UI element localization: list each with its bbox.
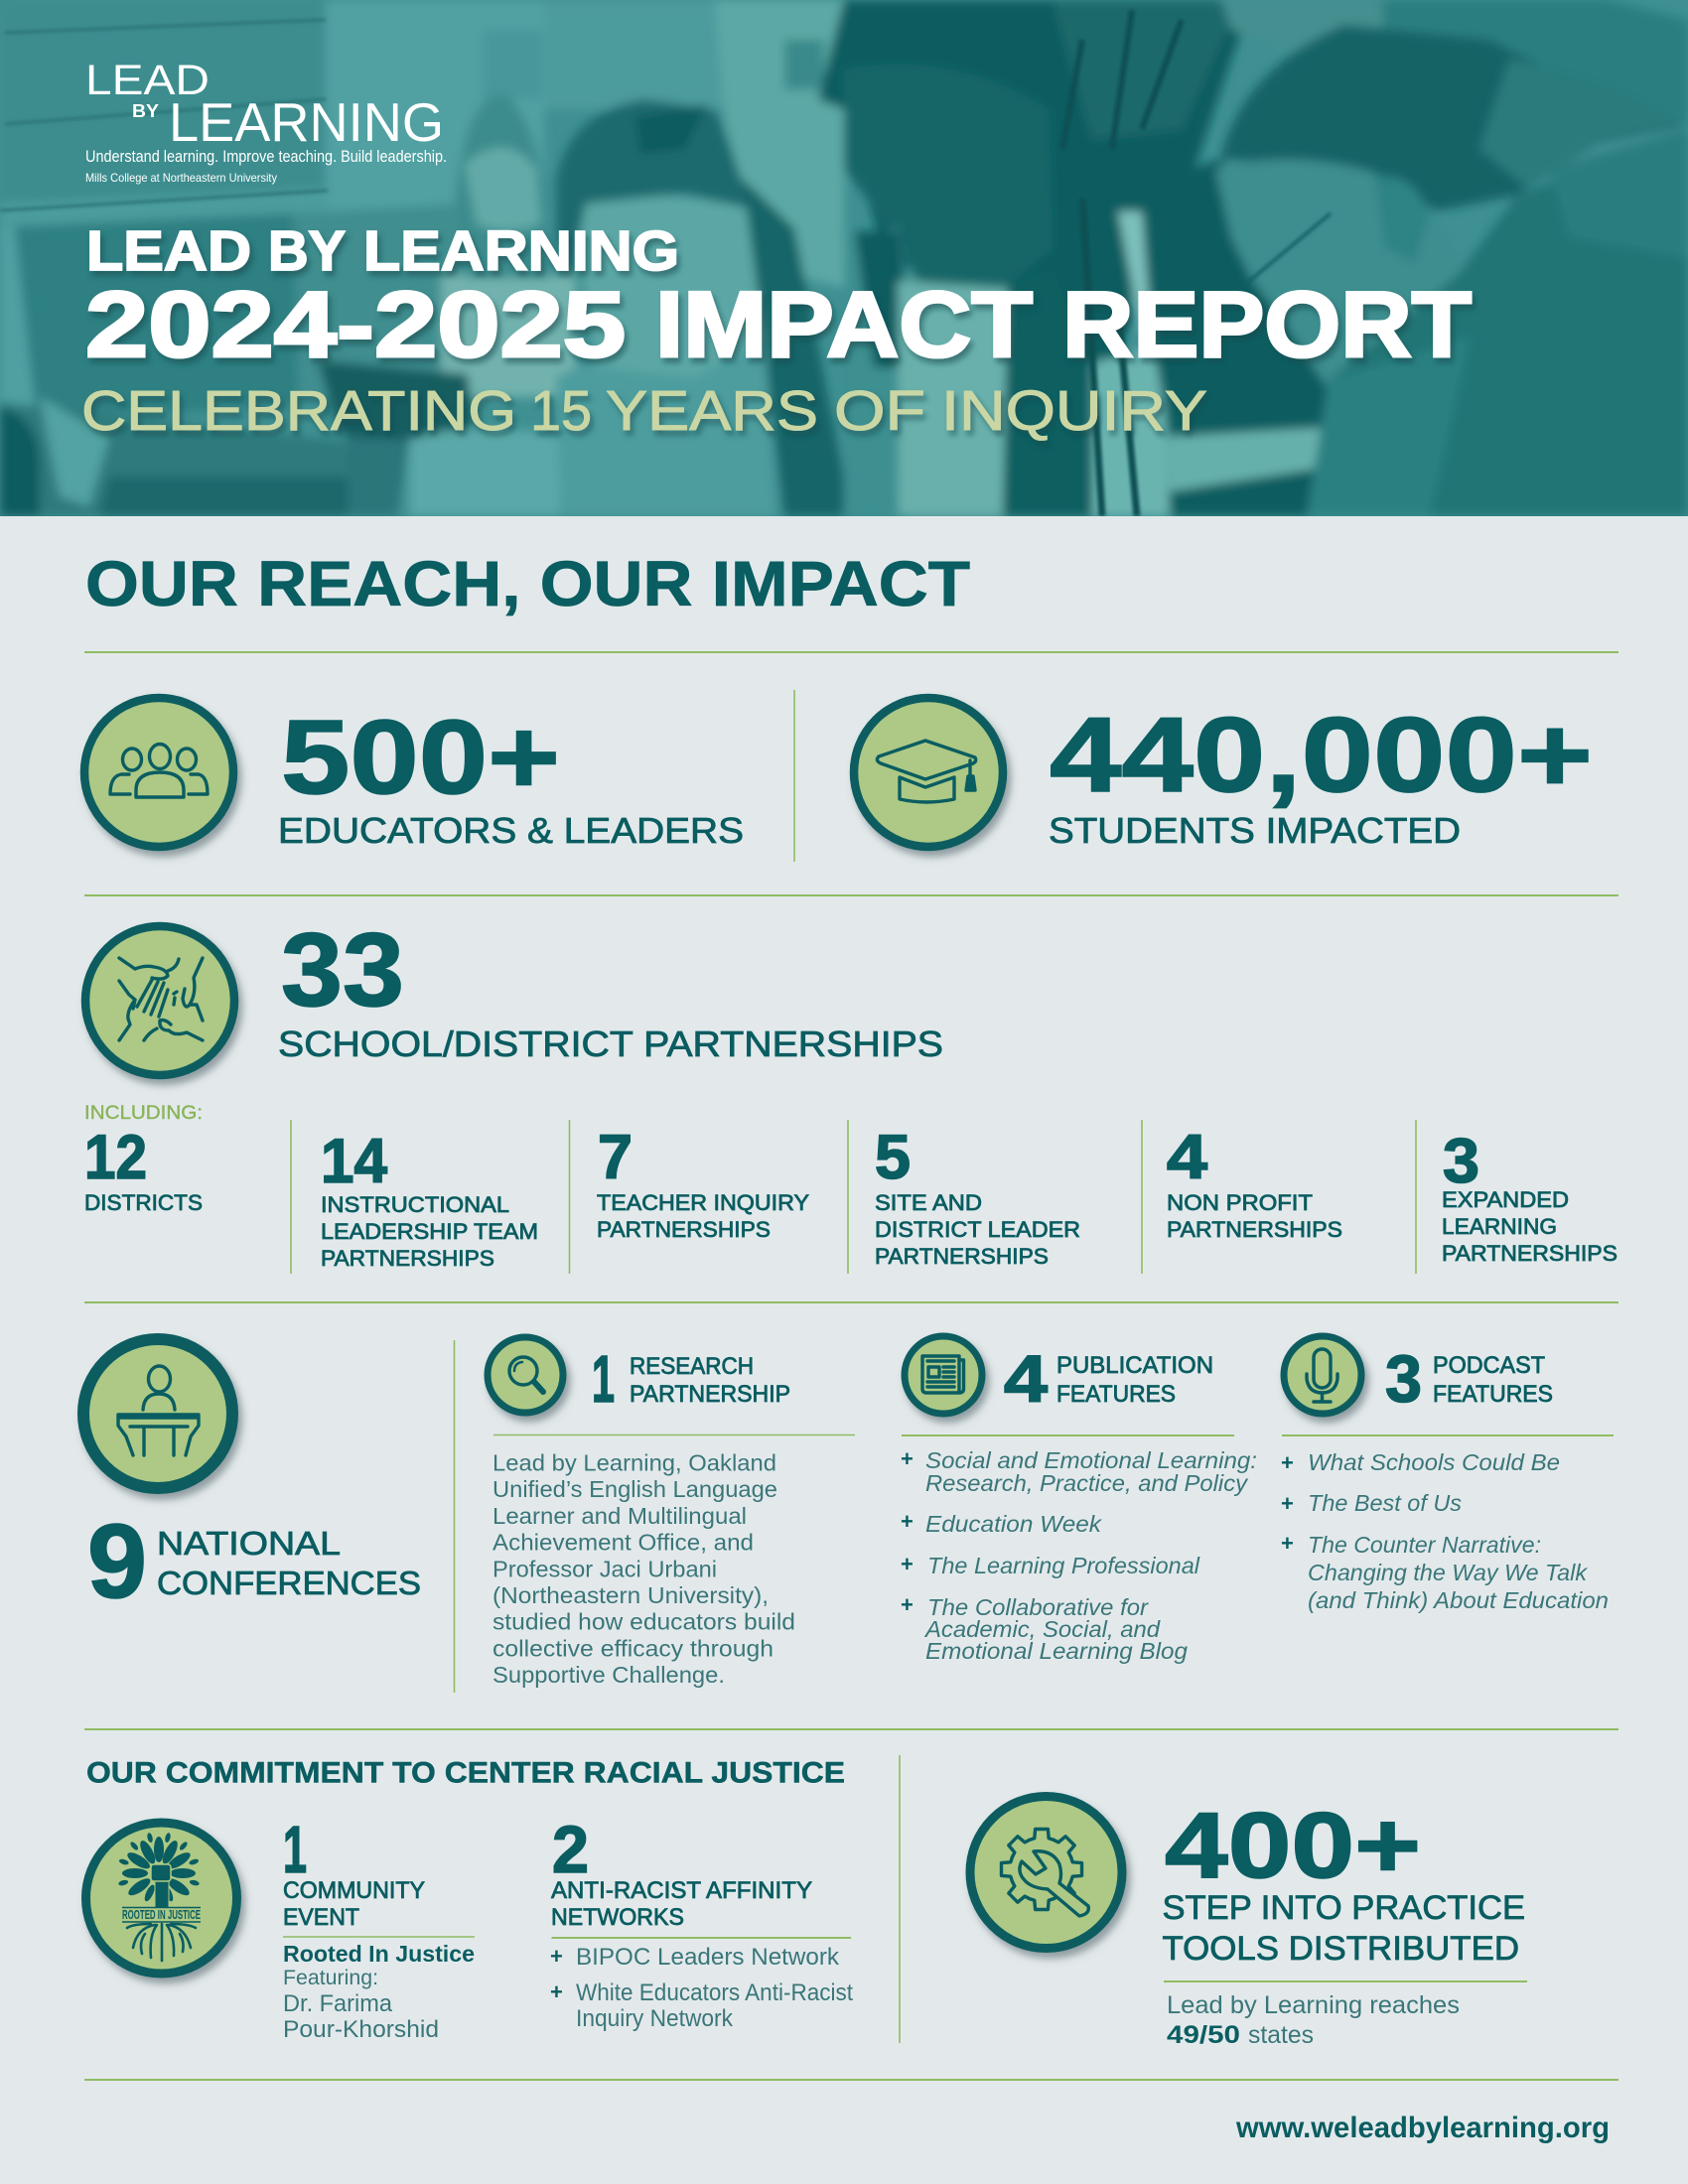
logo: Mills College at Northeastern University <box>85 171 277 185</box>
stat: step into practice tools: STEP INTO PRACTICE <box>1162 1889 1525 1927</box>
stat: anti-racist affinity networks: + <box>550 1979 563 2004</box>
panel: research partnership: RESEARCH <box>630 1353 754 1380</box>
stat: community event: Featuring: <box>283 1967 378 1989</box>
list: publications: + <box>901 1592 914 1617</box>
title: YEARS <box>606 379 818 443</box>
logo: LEAD <box>85 57 210 104</box>
stat: educators and leaders: EDUCATORS & LEADERS <box>278 810 744 851</box>
icon: rooted in justice badge: ROOTED IN JUSTICE <box>122 1908 201 1922</box>
icon: magnifier <box>488 1337 563 1413</box>
panel: podcast features: PODCAST <box>1433 1352 1545 1379</box>
text: research description: Supportive Challenge. <box>492 1662 725 1688</box>
icon: rooted in justice badge <box>85 1823 236 1974</box>
title: OF <box>834 379 925 443</box>
list: podcasts: The Counter Narrative: <box>1308 1532 1541 1558</box>
stat: teacher inquiry <box>597 1123 809 1242</box>
hero banner photo <box>0 0 1688 516</box>
stat: community event: Dr. Farima <box>283 1990 393 2017</box>
stat: site and district leader: PARTNERSHIPS <box>875 1244 1049 1269</box>
heading: racial justice commitment: OUR COMMITMENT TO CENTER RACIAL JUSTICE <box>86 1757 845 1789</box>
list: podcasts: + <box>1281 1491 1294 1516</box>
stat: teacher inquiry: TEACHER INQUIRY <box>597 1190 809 1215</box>
stat: students impacted <box>854 695 1593 851</box>
stat: site and district leader: 5 <box>875 1123 911 1192</box>
text: research description: (Northeastern University), <box>492 1582 769 1608</box>
panel: podcast features <box>1281 1336 1614 1613</box>
title: 15 <box>530 379 592 443</box>
icon: speaker at podium <box>83 1339 232 1488</box>
title: LEARNING <box>363 219 679 283</box>
list: publications: + <box>901 1446 914 1471</box>
list: publications: Research, Practice, and Policy <box>925 1470 1248 1496</box>
stat: partnerships: SCHOOL/DISTRICT PARTNERSHIPS <box>278 1024 943 1064</box>
stat: step into practice tools: 49/50 <box>1167 2021 1240 2049</box>
panel: podcast features: FEATURES <box>1433 1381 1553 1408</box>
stat: step into practice tools: Lead by Learning reaches <box>1167 1991 1460 2019</box>
label: including: INCLUDING: <box>84 1103 203 1124</box>
stat: expanded learning: LEARNING <box>1442 1214 1557 1239</box>
list: publications: Education Week <box>925 1511 1102 1537</box>
title: CELEBRATING <box>81 379 516 443</box>
stat: anti-racist affinity networks <box>550 1813 853 2032</box>
list: publications: Academic, Social, and <box>923 1616 1161 1642</box>
stat: districts <box>84 1123 203 1215</box>
stat: step into practice tools: 400+ <box>1165 1793 1421 1897</box>
panel: publication features: FEATURES <box>1056 1381 1176 1408</box>
text: research description: Achievement Office, and <box>492 1530 754 1556</box>
stat: expanded learning <box>1442 1127 1618 1266</box>
stat: partnerships: 33 <box>281 912 404 1028</box>
stat: community event: 1 <box>283 1813 307 1887</box>
icon: graduation cap <box>854 698 1003 847</box>
logo <box>85 57 447 185</box>
stat: expanded learning: PARTNERSHIPS <box>1442 1241 1618 1266</box>
list: publications <box>901 1446 1257 1664</box>
text: research description: Learner and Multilingual <box>492 1503 747 1529</box>
stat: instructional leadership team: 14 <box>321 1127 387 1196</box>
stat: step into practice tools <box>970 1793 1527 2049</box>
stat: site and district leader <box>875 1123 1080 1269</box>
title: REPORT <box>1062 272 1472 376</box>
heading: our reach, our impact: OUR REACH, OUR IMPACT <box>85 548 970 619</box>
title: LEAD <box>86 219 251 283</box>
stat: community event: Pour-Khorshid <box>283 2016 439 2043</box>
list: publications: + <box>901 1509 914 1534</box>
list: publications: Social and Emotional Learning: <box>925 1447 1257 1473</box>
stat: instructional leadership team: INSTRUCTIONAL <box>321 1192 509 1217</box>
list: podcasts <box>1281 1449 1609 1613</box>
logo: BY <box>132 101 159 121</box>
text: research description: collective efficacy through <box>492 1635 774 1661</box>
stat: districts: 12 <box>84 1123 147 1192</box>
stat: instructional leadership team: LEADERSHIP TEAM <box>321 1219 538 1244</box>
stat: anti-racist affinity networks: White Educators Anti-Racist <box>576 1979 853 2006</box>
stat: national conferences: CONFERENCES <box>157 1565 421 1601</box>
stat: students impacted: STUDENTS IMPACTED <box>1049 810 1461 851</box>
text: research description <box>492 1449 795 1688</box>
panel: research partnership: PARTNERSHIP <box>630 1381 790 1408</box>
logo: LEARNING <box>169 91 444 153</box>
icon: gear and wrench <box>970 1797 1122 1948</box>
stat: site and district leader: SITE AND <box>875 1190 982 1215</box>
list: podcasts: The Best of Us <box>1308 1490 1462 1516</box>
panel: podcast features: 3 <box>1385 1342 1422 1417</box>
icon: newspaper <box>905 1336 982 1414</box>
stat: anti-racist affinity networks: BIPOC Leaders Network <box>576 1944 840 1971</box>
text: research description: Lead by Learning, Oakland <box>492 1449 776 1475</box>
stat: national conferences <box>83 1339 421 1620</box>
stat: anti-racist affinity networks: + <box>550 1944 563 1969</box>
stat: districts: DISTRICTS <box>84 1190 203 1215</box>
stat: national conferences: 9 <box>87 1503 147 1620</box>
text: research description: Professor Jaci Urbani <box>492 1556 717 1581</box>
title <box>81 219 1472 443</box>
title: IMPACT <box>655 272 1033 376</box>
stat: community event: Rooted In Justice <box>283 1941 475 1967</box>
stat: instructional leadership team: PARTNERSHIPS <box>321 1246 494 1271</box>
list: podcasts: Changing the Way We Talk <box>1308 1560 1588 1585</box>
list: publications: + <box>901 1552 914 1576</box>
stat: national conferences: NATIONAL <box>157 1525 341 1562</box>
stat: teacher inquiry: 7 <box>598 1123 633 1192</box>
text: research description: Unified’s English Language <box>492 1476 777 1502</box>
stat: partnerships <box>85 912 943 1075</box>
icon: microphone <box>1284 1336 1361 1414</box>
stat: expanded learning: 3 <box>1443 1127 1479 1196</box>
title: 2024-2025 <box>85 272 626 376</box>
stat: instructional leadership team <box>321 1127 538 1271</box>
stat: educators and leaders <box>84 698 744 851</box>
stat: community event <box>283 1813 475 2043</box>
list: publications: The Collaborative for <box>927 1594 1149 1620</box>
text: research description: studied how educators build <box>492 1609 795 1635</box>
stat: teacher inquiry: PARTNERSHIPS <box>597 1217 771 1242</box>
stat: anti-racist affinity networks: NETWORKS <box>551 1904 684 1931</box>
icon: joined hands <box>85 926 234 1075</box>
title: INQUIRY <box>941 379 1207 443</box>
stat: anti-racist affinity networks: ANTI-RACIST AFFINITY <box>551 1877 812 1904</box>
stat: site and district leader: DISTRICT LEADER <box>875 1217 1080 1242</box>
stat: educators and leaders: 500+ <box>281 699 560 816</box>
list: podcasts: + <box>1281 1531 1294 1556</box>
stat: non profit: 4 <box>1167 1123 1207 1192</box>
panel: publication features <box>901 1336 1257 1664</box>
stat: anti-racist affinity networks: Inquiry Network <box>576 2005 734 2032</box>
list: publications: The Learning Professional <box>927 1553 1200 1578</box>
stat: community event: COMMUNITY <box>283 1877 425 1904</box>
stat: community event: EVENT <box>283 1904 359 1931</box>
website url: www.weleadbylearning.org <box>1235 2112 1610 2144</box>
list: podcasts: (and Think) About Education <box>1308 1587 1609 1613</box>
icon: people <box>84 698 233 847</box>
panel: research partnership: 1 <box>592 1342 615 1417</box>
list: podcasts: What Schools Could Be <box>1308 1449 1560 1475</box>
title: BY <box>268 219 346 283</box>
stat: non profit: NON PROFIT <box>1167 1190 1313 1215</box>
stat: non profit: PARTNERSHIPS <box>1167 1217 1342 1242</box>
panel: publication features: 4 <box>1004 1342 1048 1417</box>
panel: research partnership <box>488 1337 855 1688</box>
stat: students impacted: 440,000+ <box>1050 695 1593 814</box>
stat: step into practice tools: states <box>1248 2021 1314 2049</box>
logo: Understand learning. Improve teaching. Build leadership. <box>85 147 447 166</box>
list: publications: Emotional Learning Blog <box>925 1638 1188 1664</box>
stat: expanded learning: EXPANDED <box>1442 1187 1569 1212</box>
list: podcasts: + <box>1281 1450 1294 1475</box>
panel: publication features: PUBLICATION <box>1056 1352 1213 1379</box>
stat: step into practice tools: TOOLS DISTRIBUTED <box>1162 1930 1519 1968</box>
stat: non profit <box>1167 1123 1342 1242</box>
stat: anti-racist affinity networks: 2 <box>552 1813 589 1887</box>
